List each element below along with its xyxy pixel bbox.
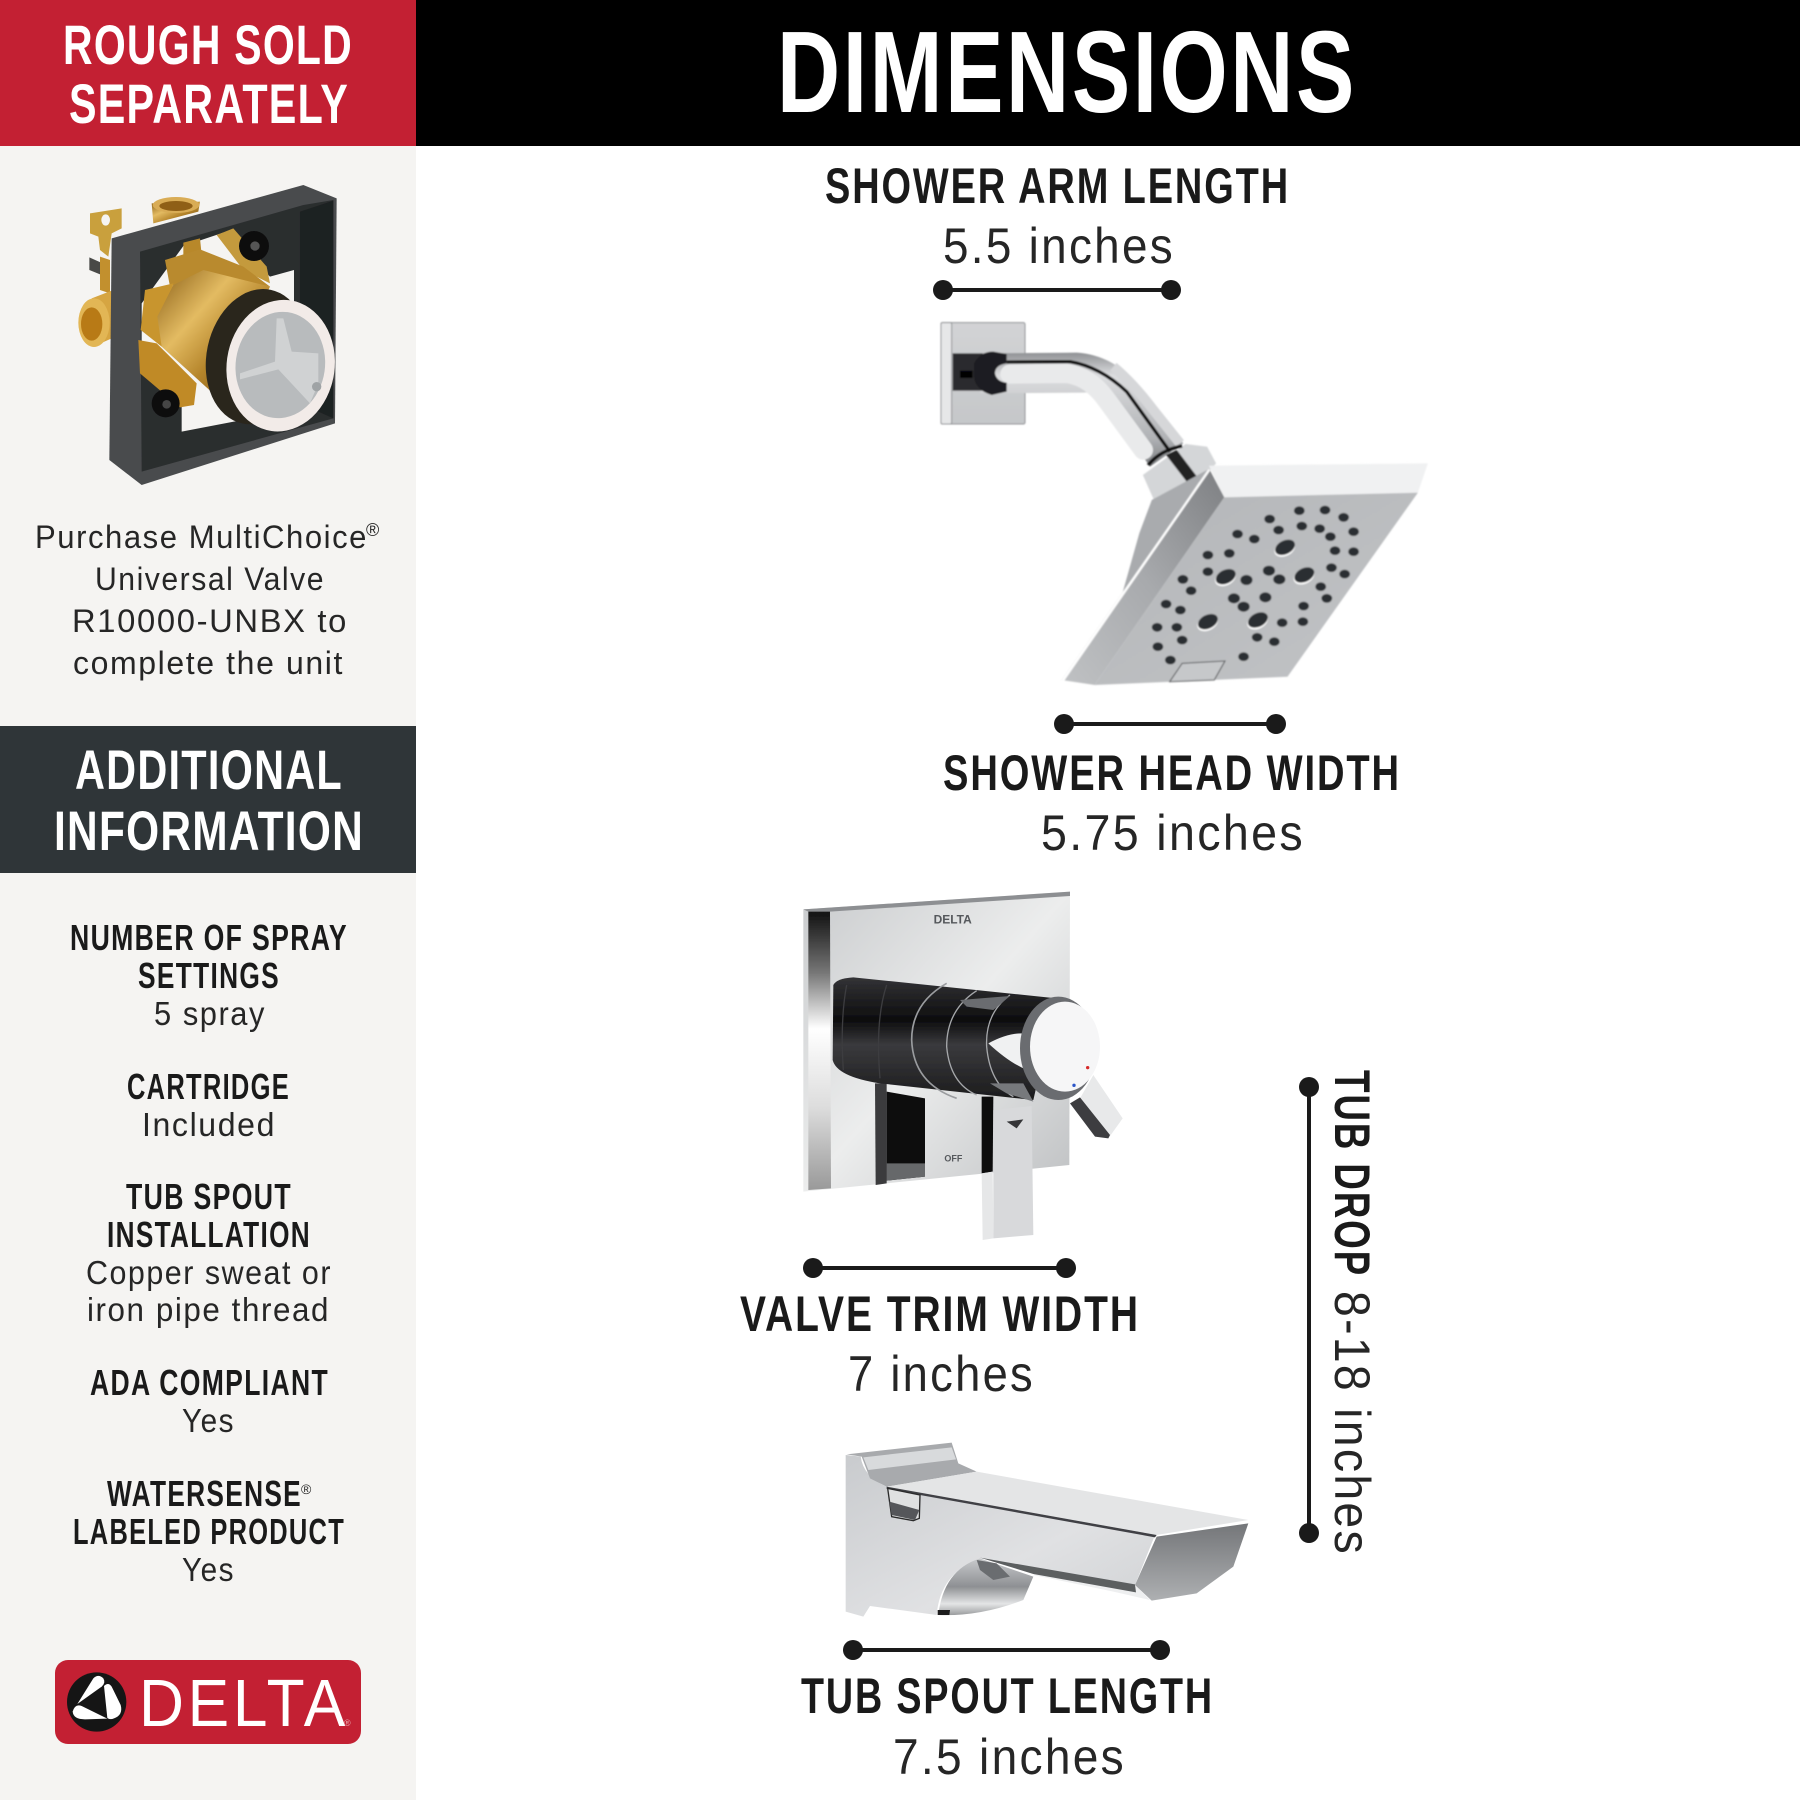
dimension line: tub spout — [843, 1640, 1170, 1660]
text block: tub spout installation: Copper sweat or — [86, 1254, 332, 1291]
icon: tub spout — [846, 1443, 1248, 1617]
heading: shower head width: 5.75 inches — [1041, 805, 1305, 861]
title: dimensions: DIMENSIONS — [777, 7, 1357, 137]
panel: rough sold separately banner: ROUGH SOLD — [63, 13, 353, 76]
left pipe — [92, 291, 112, 347]
heading: shower arm length: SHOWER ARM LENGTH — [825, 158, 1290, 214]
panel: rough sold separately banner: SEPARATELY — [69, 72, 349, 135]
dimension line: shower arm — [933, 280, 1181, 300]
button — [1170, 661, 1225, 682]
brass valve body — [183, 238, 202, 258]
heading: tub drop rotated: TUB DROP — [1324, 1070, 1380, 1277]
dimension line: valve trim — [803, 1258, 1076, 1278]
text block: purchase valve note: ® — [366, 520, 379, 540]
collar and cap — [194, 279, 320, 434]
heading: shower head width: SHOWER HEAD WIDTH — [943, 745, 1401, 801]
text block: purchase valve note: R10000-UNBX to — [72, 603, 348, 639]
heading: tub spout length — [801, 1668, 1214, 1785]
icon: valve trim — [803, 892, 1123, 1240]
panel: additional information banner: ADDITIONAL — [75, 738, 343, 801]
small nozzles — [1152, 506, 1359, 664]
text block: purchase valve note: Purchase MultiChoice — [35, 519, 368, 555]
barrel — [833, 977, 1057, 1100]
handle disc — [1020, 997, 1097, 1100]
panel: additional information banner: INFORMATION — [54, 799, 364, 862]
heading: valve trim width: 7 inches — [848, 1346, 1035, 1402]
text block: number of spray settings — [70, 917, 348, 1032]
spray face — [1095, 493, 1418, 685]
head assembly — [1061, 444, 1428, 685]
head top edge — [1209, 463, 1428, 497]
panel: additional information banner — [0, 726, 416, 873]
text block: number of spray settings: SETTINGS — [138, 955, 280, 996]
icon: valve trim: OFF — [944, 1154, 963, 1164]
head back — [1121, 470, 1207, 597]
text block: watersense labeled product: LABELED PRODUCT — [73, 1511, 345, 1552]
heading: valve trim width: VALVE TRIM WIDTH — [740, 1286, 1140, 1342]
heading: shower head width — [943, 745, 1401, 861]
text block: tub spout installation: TUB SPOUT — [126, 1176, 292, 1217]
head side — [1061, 468, 1224, 685]
lever — [1080, 1075, 1123, 1138]
text block: cartridge — [127, 1066, 290, 1143]
mounting bracket — [90, 208, 122, 257]
text block: tub spout installation: iron pipe thread — [87, 1291, 330, 1328]
text block: purchase valve note — [35, 519, 379, 681]
text block: watersense labeled product — [73, 1473, 345, 1588]
text block: cartridge: Included — [142, 1106, 276, 1143]
icon: delta logo — [55, 1660, 361, 1744]
text block: ada compliant: ADA COMPLIANT — [90, 1362, 329, 1403]
text block: tub spout installation — [86, 1176, 332, 1328]
wall plate and arm — [941, 323, 1183, 467]
heading: tub drop rotated — [1324, 1070, 1380, 1556]
text block: ada compliant: Yes — [182, 1402, 235, 1439]
heading: tub drop rotated: 8-18 inches — [1324, 1291, 1380, 1556]
diverter lever — [982, 1097, 993, 1173]
text block: purchase valve note: complete the unit — [73, 645, 344, 681]
large nozzles — [1194, 537, 1317, 635]
text block: tub spout installation: INSTALLATION — [107, 1214, 311, 1255]
top pipe — [152, 202, 200, 223]
icon: shower head and arm — [941, 323, 1428, 685]
text block: purchase valve note: Universal Valve — [95, 561, 325, 597]
icon: valve trim: DELTA — [934, 912, 972, 926]
text block: watersense labeled product: WATERSENSE — [107, 1473, 302, 1514]
dimension line: shower head — [1054, 714, 1286, 734]
panel: black header bar — [416, 0, 1800, 146]
heading: shower arm length: 5.5 inches — [943, 218, 1175, 274]
text block: number of spray settings: 5 spray — [154, 995, 266, 1032]
heading: shower arm length — [825, 158, 1290, 274]
text block: watersense labeled product: Yes — [182, 1551, 235, 1588]
text block: watersense labeled product: ® — [301, 1481, 312, 1497]
dimension line: tub drop — [1299, 1077, 1319, 1543]
panel: left sidebar — [0, 146, 416, 1800]
icon: rough-in valve product image — [78, 185, 343, 485]
heading: valve trim width — [740, 1286, 1140, 1402]
heading: tub spout length: TUB SPOUT LENGTH — [801, 1668, 1214, 1724]
frame — [109, 185, 337, 485]
collar — [1143, 444, 1216, 501]
heading: tub spout length: 7.5 inches — [893, 1729, 1126, 1785]
text block: cartridge: CARTRIDGE — [127, 1066, 290, 1107]
text block: ada compliant — [90, 1362, 329, 1439]
icon: delta logo: ® — [344, 1718, 351, 1728]
valve screws — [239, 231, 269, 261]
text block: number of spray settings: NUMBER OF SPRAY — [70, 917, 348, 958]
panel: rough sold separately banner — [0, 0, 416, 146]
icon: delta logo: DELTA — [139, 1666, 349, 1741]
lower stem — [875, 1083, 887, 1185]
